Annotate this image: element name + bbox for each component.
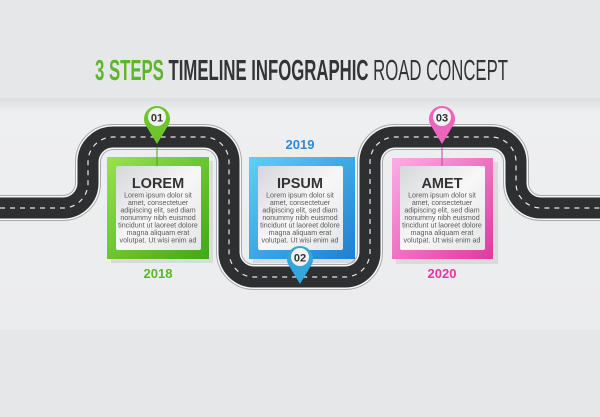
card: amet 2020: amet, consectetuer [412,199,473,207]
card: amet 2020: nonummy nibh euismod [404,214,480,222]
card: ipsum 2019: magna aliquam erat [269,229,331,237]
pin 03: 03 [436,112,448,124]
road [0,137,600,277]
card: lorem 2018: LOREM [132,176,184,192]
card: lorem 2018: amet, consectetuer [128,199,189,207]
card: amet 2020: AMET [421,176,463,192]
card: lorem 2018: tincidunt ut laoreet dolore [118,222,198,230]
card: lorem 2018: adipiscing elit, sed diam [120,206,196,214]
pin 03 [429,106,455,144]
card: ipsum 2019: IPSUM [277,176,323,192]
pin 01 [144,106,170,144]
card: lorem 2018: nonummy nibh euismod [120,214,196,222]
pin 01: 01 [151,112,163,124]
pin 02: 02 [294,252,306,264]
title: 3 STEPS TIMELINE INFOGRAPHIC ROAD CONCEPT [95,55,508,87]
card: amet 2020: tincidunt ut laoreet dolore [402,222,482,230]
card: ipsum 2019 [249,137,355,263]
background band [0,98,600,330]
pin 02 [287,246,313,284]
card: ipsum 2019: 2019 [286,137,314,152]
card: amet 2020: Lorem ipsum dolor sit [408,192,476,200]
card: amet 2020: volutpat. Ut wisi enim ad [404,236,480,244]
card: ipsum 2019: tincidunt ut laoreet dolore [260,222,340,230]
card: lorem 2018: Lorem ipsum dolor sit [124,192,192,200]
card: ipsum 2019: Lorem ipsum dolor sit [266,192,334,200]
card: ipsum 2019: adipiscing elit, sed diam [262,206,338,214]
card: lorem 2018: volutpat. Ut wisi enim ad [120,236,196,244]
card: amet 2020: adipiscing elit, sed diam [404,206,480,214]
card: lorem 2018: 2018 [144,266,172,281]
card: ipsum 2019: amet, consectetuer [270,199,331,207]
card: amet 2020: 2020 [428,266,456,281]
card: ipsum 2019: volutpat. Ut wisi enim ad [262,236,338,244]
card: amet 2020: magna aliquam erat [411,229,473,237]
card: lorem 2018: magna aliquam erat [127,229,189,237]
card: ipsum 2019: nonummy nibh euismod [262,214,338,222]
card: lorem 2018 [107,147,213,281]
card: amet 2020 [392,147,498,281]
